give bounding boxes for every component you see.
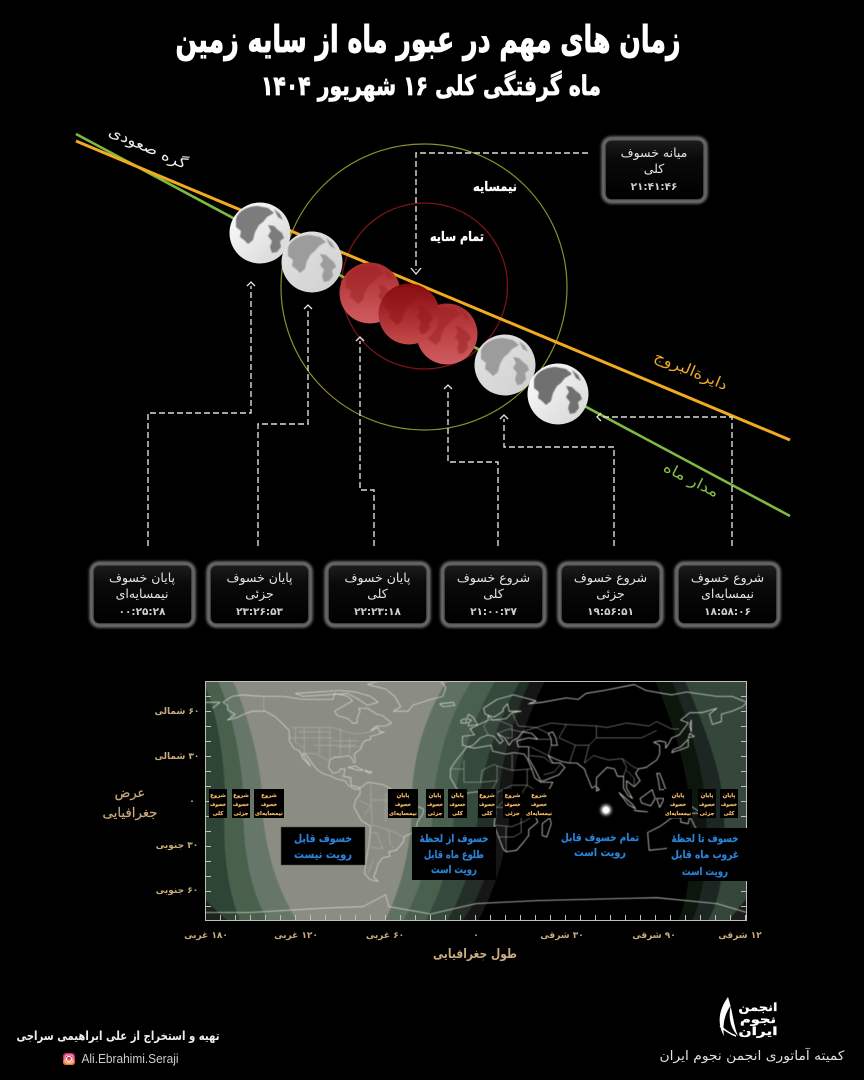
map label: end total center: کلی [452,810,464,817]
map label: start partial west: خسوف [233,802,249,808]
map label: end partial center: جزئی [428,811,442,817]
callout: total visible [561,832,639,859]
map label: start partial west: شروع [233,793,249,799]
callout: visible until moonset: خسوف تا لحظهٔ [672,833,738,845]
map label: end partial center: پایان [429,793,441,799]
box: start partial: ۱۹:۵۶:۵۱ [587,606,634,618]
latitude axis title: عرض [115,786,145,801]
callout: total visible: رویت است [574,847,626,859]
moon: mid total [378,284,440,344]
map label: start partial west [232,789,250,818]
label: umbra: تمام سایه [430,230,484,245]
map label: end penumbral center: پایان [397,793,409,799]
map label: end total east: پایان [723,793,735,799]
logo: انجمن [738,1001,778,1014]
subtitle: ماه گرفتگی کلی ۱۶ شهریور ۱۴۰۴ [261,70,601,102]
box: start total: شروع خسوف [457,570,530,586]
box: end total: کلی [367,586,388,601]
box: end penumbral: ۰۰:۲۵:۲۸ [119,606,166,618]
logo: نجوم [740,1013,776,1026]
longitude axis title: طول جغرافیایی [433,947,517,962]
map label: end total east: خسوف [721,802,737,808]
map label: end penumbral east: پایان [672,793,684,799]
map label: start penumbral center: نیمسایه‌ای [526,811,552,817]
box: end penumbral: پایان خسوف [109,570,176,586]
map label: end total center: پایان [451,793,464,799]
map label: end partial center: خسوف [427,802,443,808]
moon: end penumbral [230,202,290,264]
map label: start penumbral center: خسوف [531,802,547,808]
organization name: کمیته آماتوری انجمن نجوم ایران [660,1047,845,1064]
map label: end partial east: پایان [701,793,713,799]
box: start penumbral: شروع خسوف [691,570,764,586]
label: ascending node: گره صعودی [106,122,191,173]
callout: not visible: رویت نیست [294,849,352,861]
box: end total: ۲۲:۲۳:۱۸ [354,606,402,618]
map label: start total center [478,789,496,818]
latitude axis labels [155,707,199,896]
map label: start total west: کلی [213,810,224,817]
visibility map [205,677,747,921]
logo: ایران [738,1025,778,1038]
box: start partial: جزئی [596,586,625,602]
callout: visible from moonrise: خسوف از لحظهٔ [420,833,488,845]
callout: visible until moonset: غروب ماه قابل [671,849,739,861]
box: end total: پایان خسوف [344,570,411,586]
callout: visible from moonrise [412,827,496,880]
map label: start penumbral west [254,789,284,818]
map label: end total center [448,789,467,818]
map label: start total west: خسوف [210,802,226,808]
box: start total: ۲۱:۰۰:۳۷ [470,606,518,618]
box: start penumbral: ۱۸:۵۸:۰۶ [704,606,751,618]
map label: start partial west: جزئی [234,811,248,817]
latitude axis labels: ۶۰ جنوبی [156,886,198,896]
moon: start partial [474,334,536,396]
map label: start total center: کلی [482,810,493,817]
latitude axis labels: ۰ [189,797,195,807]
latitude axis title [102,786,158,821]
box: mid totality: میانه خسوف [621,145,687,161]
map label: end penumbral center: خسوف [395,802,411,808]
callout: visible from moonrise: طلوع ماه قابل [424,849,484,861]
ticks [205,681,747,921]
box: start total: کلی [483,586,504,601]
map label: start penumbral west: نیمسایه‌ای [255,811,283,817]
map label: start total west: شروع [210,793,226,799]
longitude axis labels [184,931,762,941]
longitude axis labels: ۹۰ شرقی [632,931,676,941]
ecliptic line [76,141,790,440]
label: penumbra: نیمسایه [473,180,517,195]
map label: start total west [209,789,227,818]
map label: end partial east [698,789,716,818]
logo [720,997,778,1038]
box: end partial: پایان خسوف [226,570,293,586]
moon: start penumbral [528,364,588,424]
map label: start penumbral west: شروع [261,793,277,799]
credit: تهیه و استخراج از علی ابراهیمی سراجی [16,1028,220,1043]
penumbra circle [281,144,567,430]
callout: visible until moonset [667,828,747,881]
map label: end penumbral east: نیمسایه‌ای [665,811,691,817]
latitude axis labels: ۳۰ جنوبی [156,841,198,851]
map label: end partial east: جزئی [700,811,714,817]
map label: start total center: خسوف [479,802,495,808]
map label: start partial center [503,789,522,818]
map label: end partial east: خسوف [699,802,715,808]
box: start partial [560,564,662,626]
map label: start penumbral center [525,789,553,818]
map label: start partial center: خسوف [504,802,521,808]
moon: end partial [282,232,342,292]
map label: start partial center: جزئی [505,811,520,817]
longitude axis labels: ۱۲ شرقی [718,931,762,941]
map label: start partial center: شروع [505,793,520,799]
box: end penumbral [92,564,194,626]
map label: end penumbral east: خسوف [670,802,686,808]
map label: start penumbral west: خسوف [261,802,277,808]
box: end penumbral: نیمسایه‌ای [116,586,168,601]
longitude axis labels: ۰ [473,931,479,941]
map label: start total center: شروع [479,793,495,799]
icon: instagram [63,1053,75,1065]
box: end total [326,564,428,626]
map label: end partial center [426,789,444,818]
box: end partial [208,564,310,626]
map label: end penumbral center [388,789,418,818]
longitude axis labels: ۶۰ غربی [366,931,404,941]
map label: end penumbral center: نیمسایه‌ای [389,811,417,817]
map label: start penumbral center: شروع [531,793,547,799]
longitude axis labels: ۱۲۰ غربی [274,931,318,941]
box: mid totality: کلی [644,161,664,176]
world coastlines [205,677,747,914]
longitude axis labels: ۱۸۰ غربی [184,931,228,941]
map label: end total center: خسوف [450,802,466,808]
dashed arrows [148,153,732,546]
map label: end penumbral east [664,789,692,818]
label: moon orbit: مدار ماه [660,458,722,501]
instagram handle: Ali.Ebrahimi.Seraji [82,1051,179,1066]
latitude axis labels: ۳۰ شمالی [155,752,199,762]
box: start total [442,564,544,626]
callout: not visible [281,827,365,865]
box: mid totality [604,138,706,202]
moon: start total [416,304,478,364]
latitude axis labels: ۶۰ شمالی [155,707,199,717]
umbra circle [342,203,508,369]
callout: visible until moonset: رویت است [682,866,728,878]
latitude axis title: جغرافیایی [102,806,158,821]
callout: visible from moonrise: رویت است [431,864,477,876]
moon orbit line [76,134,790,516]
label: ecliptic: دایرة‌البروج [651,347,730,395]
map label: end total east [720,789,738,818]
callout: total visible: تمام خسوف قابل [561,832,639,844]
box: start partial: شروع خسوف [574,570,647,586]
moon: end total [340,262,400,324]
subsolar point [601,805,611,815]
box: end partial: ۲۳:۲۶:۵۳ [236,606,284,618]
box: end partial: جزئی [245,586,274,602]
box: start penumbral: نیمسایه‌ای [701,586,754,601]
longitude axis labels: ۳۰ شرقی [540,931,584,941]
callout: not visible: خسوف قابل [294,833,352,845]
box: start penumbral [676,564,778,626]
map label: end total east: کلی [724,810,735,817]
box: mid totality: ۲۱:۴۱:۴۶ [631,181,677,193]
